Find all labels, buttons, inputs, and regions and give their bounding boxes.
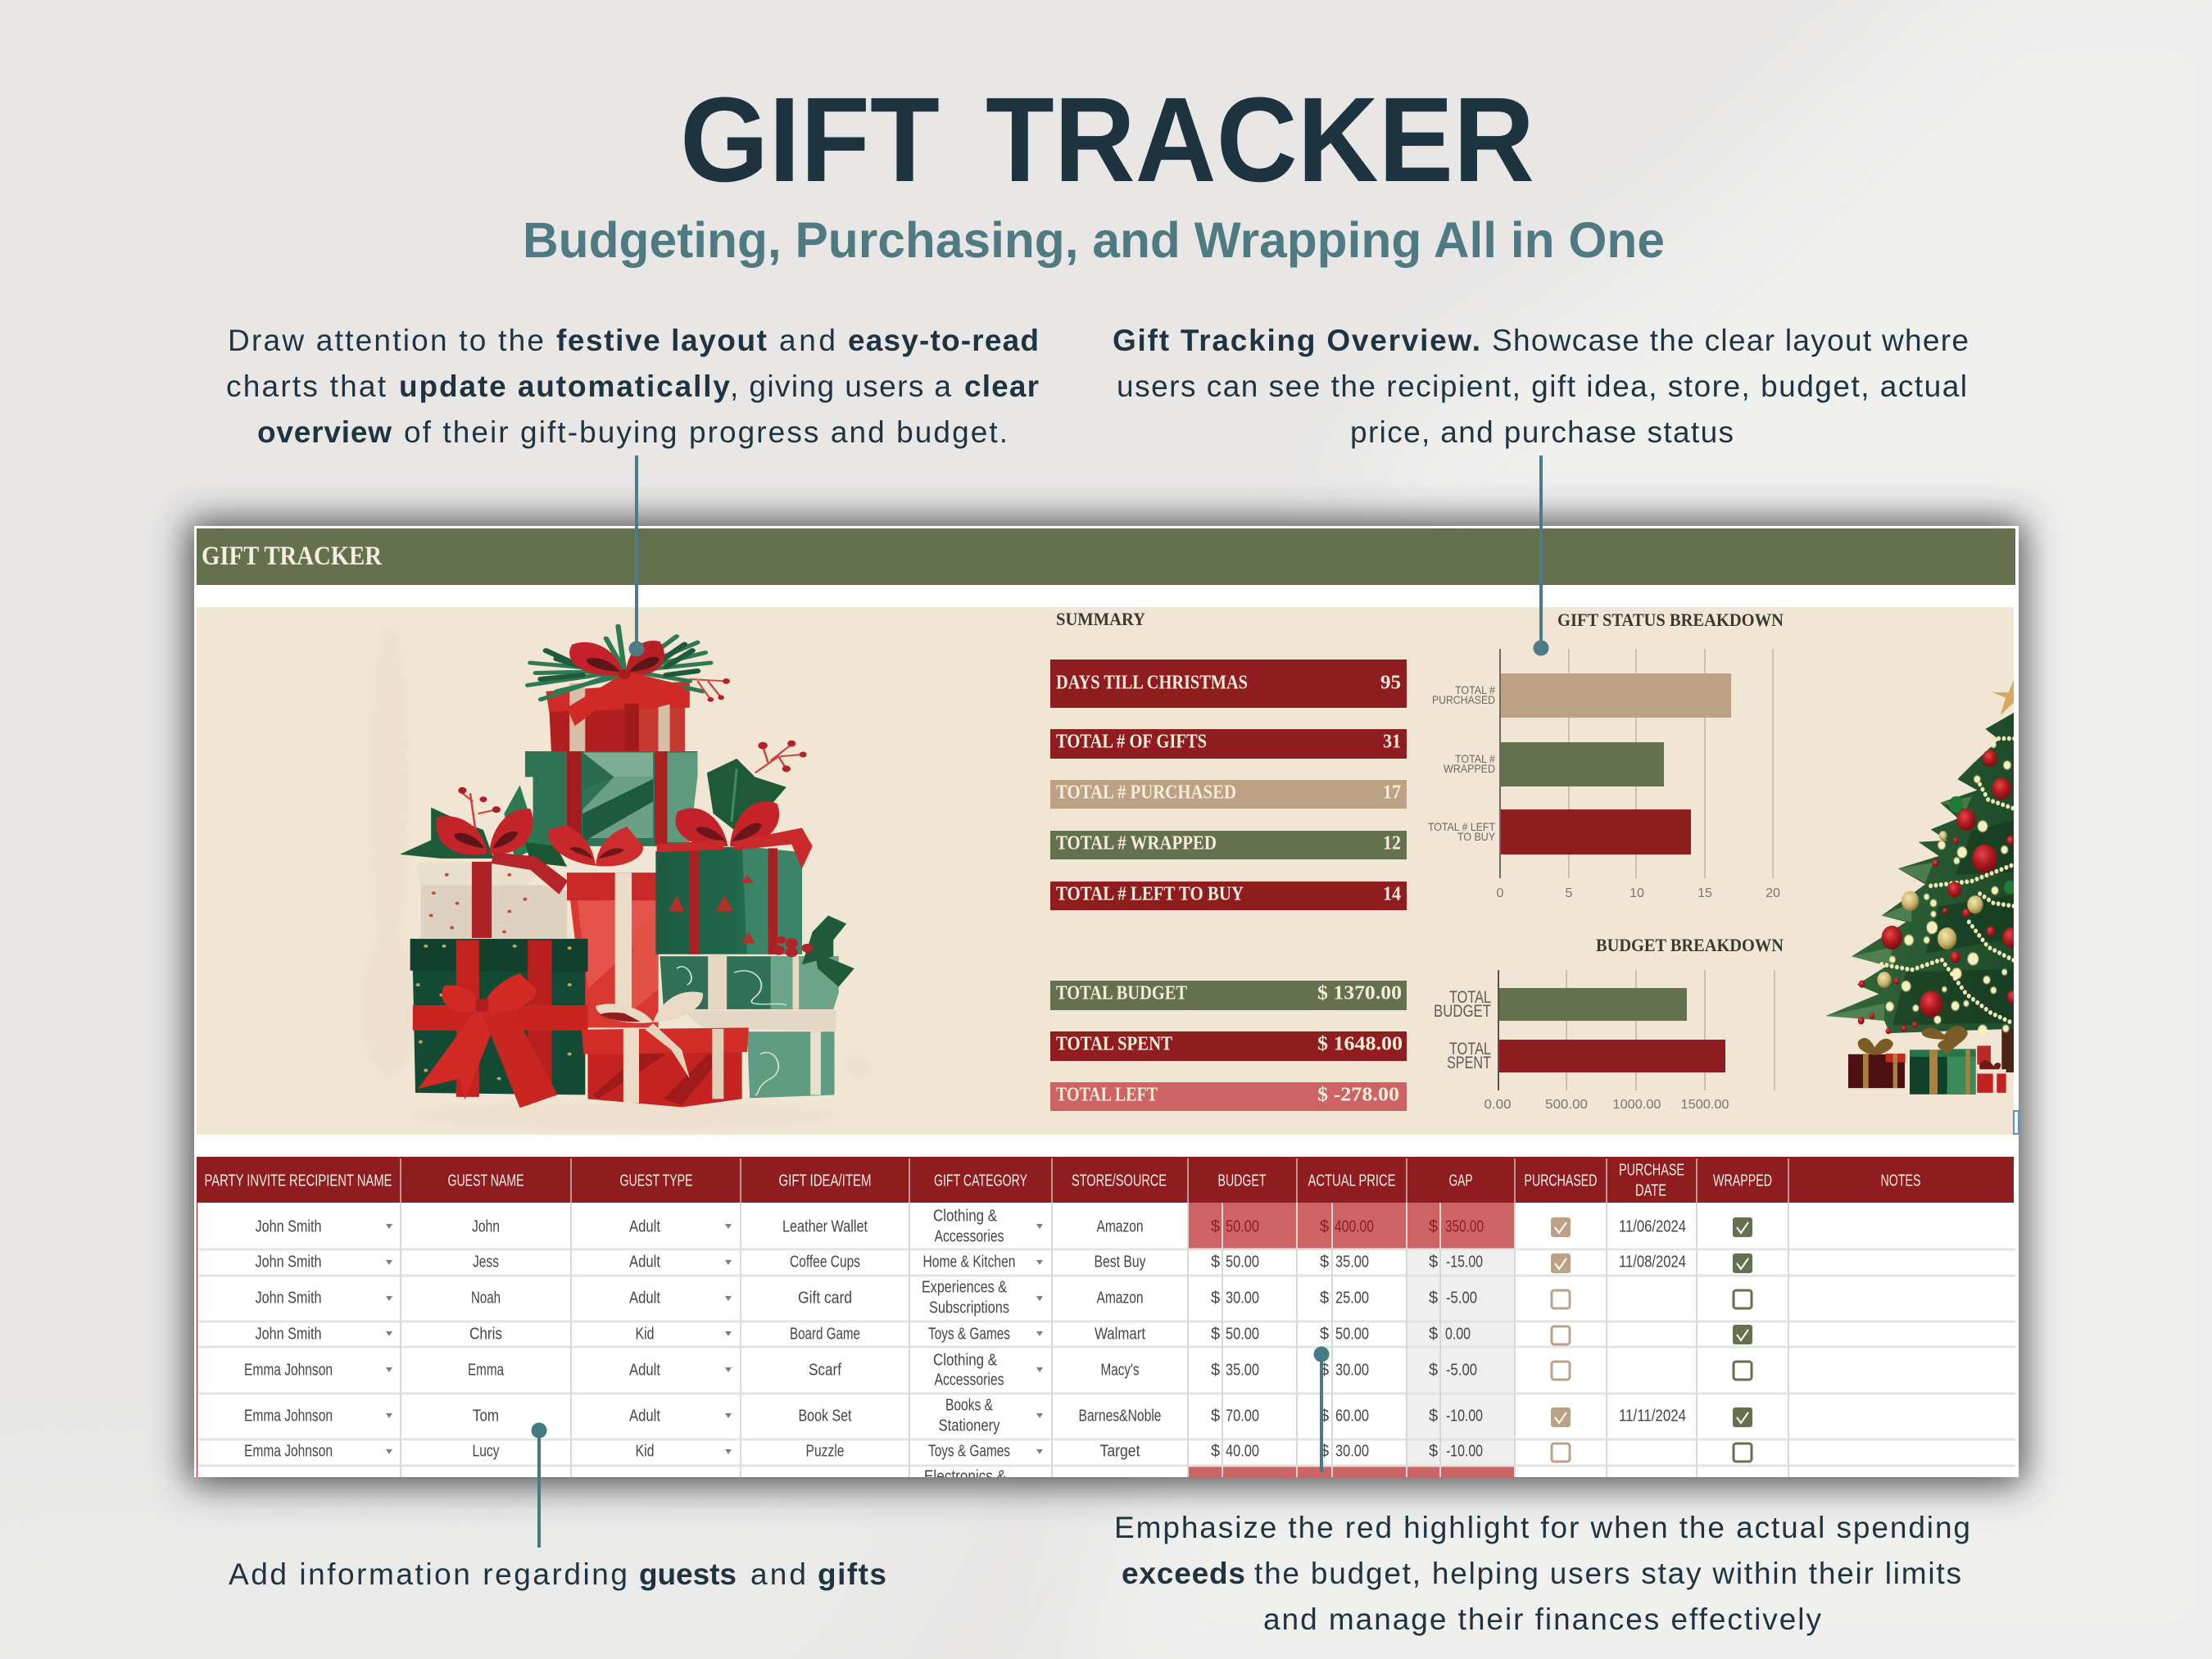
table header row: PARTY INVITE RECIPIENT NAME <box>205 1172 392 1190</box>
summary stat: left to buy <box>1050 882 1407 910</box>
callout text: red highlight: and manage their finances effectively <box>1263 1602 1822 1636</box>
gift categories: Experiences & <box>922 1278 1008 1296</box>
table header row: WRAPPED <box>1713 1172 1772 1190</box>
budget column: $ <box>1211 1407 1220 1426</box>
budget column: 70.00 <box>1226 1407 1259 1426</box>
bottom red box <box>582 992 749 1107</box>
panel shadow <box>188 521 2024 1484</box>
bar: wrapped <box>1500 742 1664 786</box>
chart: gift status breakdown: TOTAL # <box>1455 683 1495 696</box>
callout text: festive layout: of their gift-buying progress and budget. <box>404 415 1008 449</box>
recipient names: John Smith <box>256 1326 321 1344</box>
callout text: red highlight: the budget, helping users stay within their limits <box>1254 1557 1961 1590</box>
guest types: Adult <box>629 1217 660 1235</box>
guest types: Adult <box>629 1362 660 1380</box>
header band: GIFT TRACKER <box>202 542 383 571</box>
summary stat: total spent: $ 1648.00 <box>1317 1034 1403 1055</box>
callout text: guests and gifts: guests <box>639 1557 737 1591</box>
actual price column: 25.00 <box>1335 1290 1369 1308</box>
chart: gift status breakdown: 20 <box>1766 886 1780 900</box>
guest names: Noah <box>471 1290 501 1308</box>
chart: budget breakdown: 500.00 <box>1545 1098 1588 1112</box>
gift categories: Books & <box>945 1396 994 1414</box>
right bow and holly <box>657 741 813 868</box>
callout text: guests and gifts: Add information regarding <box>229 1557 628 1591</box>
title: GIFT <box>680 73 940 207</box>
chart: gift status breakdown: 10 <box>1630 886 1644 900</box>
stores: Amazon <box>1096 1217 1144 1235</box>
gift categories: Electronics & <box>924 1468 1007 1486</box>
summary stat: days till christmas: DAYS TILL CHRISTMAS <box>1056 672 1248 693</box>
callout text: red highlight <box>1114 1511 1970 1636</box>
chart: gift status breakdown: TO BUY <box>1457 830 1496 843</box>
small centre bow <box>548 825 643 866</box>
cream box <box>416 862 567 938</box>
summary stat: days till christmas <box>1050 660 1407 708</box>
summary stat: wrapped: 12 <box>1383 832 1401 854</box>
gift ideas: Board Game <box>790 1326 860 1344</box>
budget column: $ <box>1211 1442 1220 1460</box>
gap column: $ <box>1429 1217 1438 1235</box>
teal box <box>525 751 697 846</box>
gift categories: Toys & Games <box>928 1326 1010 1344</box>
table header row: ACTUAL PRICE <box>1308 1172 1396 1190</box>
section heading: summary: SUMMARY <box>1056 609 1145 629</box>
budget column: $ <box>1211 1362 1220 1380</box>
bar: total budget <box>1498 988 1687 1021</box>
gap column: -10.00 <box>1446 1442 1483 1460</box>
chart: gift status breakdown: TOTAL # <box>1455 752 1495 765</box>
actual price column: $ <box>1320 1290 1329 1308</box>
guest names: Jess <box>473 1253 499 1271</box>
summary stat: total left <box>1050 1082 1407 1111</box>
summary stat: total left: TOTAL LEFT <box>1056 1085 1158 1106</box>
guest names: Lucy <box>472 1442 500 1460</box>
callout text: festive layout <box>226 324 1039 449</box>
callout text: guests and gifts <box>229 1557 886 1591</box>
gift categories: Home & Kitchen <box>922 1253 1016 1271</box>
guest types: Adult <box>629 1290 660 1308</box>
summary stat: total budget: TOTAL BUDGET <box>1056 983 1187 1004</box>
callout text: festive layout: easy-to-read <box>848 324 1039 357</box>
callout text: gift tracking overview: Gift Tracking Overview. <box>1113 324 1480 357</box>
budget column: 35.00 <box>1226 1362 1259 1380</box>
chart: budget breakdown: TOTAL <box>1449 1040 1491 1058</box>
gift ideas: Leather Wallet <box>782 1217 868 1235</box>
tree star <box>1992 680 2014 715</box>
actual price column: $ <box>1320 1326 1329 1344</box>
gap column: $ <box>1429 1407 1438 1426</box>
bar: left to buy <box>1500 809 1691 854</box>
gift categories: Subscriptions <box>929 1299 1009 1317</box>
recipient names: John Smith <box>256 1290 321 1308</box>
gap column: $ <box>1429 1326 1438 1344</box>
purchase dates: 11/08/2024 <box>1619 1253 1686 1271</box>
bar: total spent <box>1498 1040 1725 1072</box>
budget column: 30.00 <box>1226 1290 1259 1308</box>
beige dashboard area <box>197 607 2014 1135</box>
selection handle <box>2014 1111 2019 1134</box>
actual price column: 30.00 <box>1335 1442 1369 1460</box>
actual price column: 400.00 <box>1335 1217 1374 1235</box>
header band <box>197 528 2015 585</box>
gift ideas: Coffee Cups <box>790 1253 860 1271</box>
connector: guests and gifts to table <box>531 1422 547 1548</box>
recipient names: John Smith <box>256 1217 321 1235</box>
garlands <box>1882 738 2015 1024</box>
summary stat: days till christmas: 95 <box>1380 672 1401 693</box>
gift categories: Toys & Games <box>928 1442 1010 1460</box>
callout text: festive layout: charts that <box>226 369 387 403</box>
illustration: christmas tree <box>1825 679 2021 1095</box>
stores: Amazon <box>1096 1290 1144 1308</box>
right green box <box>655 846 802 954</box>
table grid <box>197 1249 2015 1466</box>
title: TRACKER <box>986 73 1534 207</box>
actual price column: 50.00 <box>1335 1326 1369 1344</box>
chart: budget breakdown <box>1434 935 1784 1112</box>
guest types: Adult <box>629 1407 660 1426</box>
budget column: 50.00 <box>1226 1217 1259 1235</box>
summary stat: wrapped: TOTAL # WRAPPED <box>1056 832 1217 854</box>
gift ideas <box>782 1217 868 1460</box>
title <box>680 73 1534 207</box>
gift categories: Stationery <box>939 1417 999 1435</box>
gift categories: Accessories <box>934 1371 1004 1389</box>
budget column: $ <box>1211 1253 1220 1271</box>
chart: gift status breakdown: 0 <box>1497 886 1504 900</box>
guest names: Chris <box>469 1326 502 1344</box>
actual price column <box>1320 1217 1374 1460</box>
subtitle: Budgeting, Purchasing, and Wrapping All in One <box>523 212 1665 268</box>
actual price column: 60.00 <box>1335 1407 1369 1426</box>
gift ideas: Puzzle <box>806 1442 844 1460</box>
actual price column: $ <box>1320 1217 1329 1235</box>
centre red wrapped box <box>567 873 659 1027</box>
illustration: stack of gifts <box>360 622 873 1130</box>
recipient names: John Smith <box>256 1253 321 1271</box>
guest names <box>468 1217 505 1460</box>
chart: gift status breakdown: PURCHASED <box>1432 693 1495 706</box>
table header row <box>197 1157 2014 1203</box>
budget column: 40.00 <box>1226 1442 1259 1460</box>
table header row: PURCHASED <box>1524 1172 1598 1190</box>
chart: gift status breakdown: TOTAL # LEFT <box>1428 820 1495 833</box>
chart: gift status breakdown: 15 <box>1698 886 1712 900</box>
stores: Barnes&Noble <box>1078 1407 1162 1426</box>
chart: budget breakdown: SPENT <box>1447 1054 1491 1072</box>
tree foliage <box>1825 709 2021 1033</box>
summary stat: total budget: $ 1370.00 <box>1317 983 1402 1004</box>
callout text: guests and gifts: gifts <box>818 1557 886 1591</box>
gap column: $ <box>1429 1442 1438 1460</box>
summary stat: total left: $ -278.00 <box>1317 1085 1399 1106</box>
callout text: gift tracking overview: price, and purchase status <box>1350 415 1734 449</box>
callout text: festive layout: update automatically <box>399 369 730 403</box>
purchased checkboxes <box>1551 1217 1571 1462</box>
dark green box <box>410 939 587 1108</box>
lower right teal box <box>660 916 854 1098</box>
actual price column: $ <box>1320 1253 1329 1271</box>
summary stat: purchased: TOTAL # PURCHASED <box>1056 782 1236 803</box>
guest types: Adult <box>629 1253 660 1271</box>
chart: gift status breakdown: WRAPPED <box>1444 762 1495 775</box>
gap column <box>1429 1217 1484 1460</box>
wrapped checkboxes <box>1733 1217 1752 1462</box>
chart: budget breakdown: 0.00 <box>1484 1098 1512 1112</box>
recipient names <box>244 1217 333 1460</box>
gift ideas: Gift card <box>798 1290 852 1308</box>
callout text: festive layout: and <box>779 324 836 357</box>
gap column: $ <box>1429 1290 1438 1308</box>
gift categories: Clothing & <box>933 1208 998 1226</box>
gap column: -5.00 <box>1446 1290 1477 1308</box>
summary stat: left to buy: TOTAL # LEFT TO BUY <box>1056 883 1244 904</box>
top red box <box>546 681 690 751</box>
purchase dates: 11/11/2024 <box>1619 1407 1686 1426</box>
actual price column: $ <box>1320 1407 1329 1426</box>
callout text: gift tracking overview: users can see the recipient, gift idea, store, budget, actual <box>1117 369 1967 403</box>
table header row: BUDGET <box>1217 1172 1267 1190</box>
actual price column: 30.00 <box>1335 1362 1369 1380</box>
recipient names: Emma Johnson <box>244 1407 333 1426</box>
summary stat: total gifts: TOTAL # OF GIFTS <box>1056 731 1207 752</box>
budget column: $ <box>1211 1326 1220 1344</box>
purchase dates: 11/06/2024 <box>1619 1217 1686 1235</box>
summary stat: total gifts <box>1050 729 1407 759</box>
guest names: John <box>472 1217 500 1235</box>
recipient names: Emma Johnson <box>244 1442 333 1460</box>
table left edge <box>195 1157 197 1477</box>
connector: red highlight to price column <box>1314 1347 1329 1472</box>
gap column: $ <box>1429 1253 1438 1271</box>
gap column: -5.00 <box>1446 1362 1477 1380</box>
budget column <box>1211 1217 1259 1460</box>
chart: budget breakdown: 1500.00 <box>1681 1098 1729 1112</box>
budget highlight cells <box>1188 1203 1515 1477</box>
gap column: -10.00 <box>1446 1407 1483 1426</box>
guest names: Tom <box>473 1407 499 1426</box>
table header row: GUEST TYPE <box>619 1172 693 1190</box>
left bow and holly <box>400 785 568 895</box>
gap column: -15.00 <box>1446 1253 1483 1271</box>
budget column: 50.00 <box>1226 1253 1259 1271</box>
actual price column: $ <box>1320 1362 1329 1380</box>
stores: Best Buy <box>1095 1253 1145 1271</box>
table header row: GIFT IDEA/ITEM <box>778 1172 872 1190</box>
callout text: gift tracking overview <box>1113 324 1969 449</box>
guest types <box>629 1217 660 1460</box>
gift categories <box>922 1208 1016 1486</box>
callout text: festive layout: Draw attention to the <box>228 324 544 357</box>
gap column: 0.00 <box>1445 1326 1471 1344</box>
summary stat: total spent: TOTAL SPENT <box>1056 1034 1172 1055</box>
guest types: Kid <box>636 1326 654 1344</box>
budget column: $ <box>1211 1217 1220 1235</box>
ornaments <box>1858 750 2020 1034</box>
connector: gift tracking overview to chart <box>1534 456 1548 655</box>
summary stat: left to buy: 14 <box>1383 883 1401 904</box>
actual price column: 35.00 <box>1335 1253 1369 1271</box>
chart: budget breakdown: TOTAL <box>1449 988 1491 1007</box>
purchase dates <box>1619 1217 1686 1426</box>
callout text: festive layout: , giving users a <box>730 369 951 403</box>
chart: gift status breakdown <box>1428 610 1784 900</box>
lights <box>1886 741 2011 1036</box>
chart: budget breakdown: 1000.00 <box>1612 1098 1661 1112</box>
recipient names: Emma Johnson <box>244 1362 333 1380</box>
chart: budget breakdown: BUDGET BREAKDOWN <box>1596 935 1784 955</box>
top bow and pine <box>528 626 730 726</box>
guest types: Kid <box>636 1442 654 1460</box>
gift ideas: Book Set <box>798 1407 852 1426</box>
callout text: red highlight: Emphasize the red highlight for when the actual spending <box>1114 1511 1970 1544</box>
table header row: GIFT CATEGORY <box>934 1172 1027 1190</box>
summary stat: total gifts: 31 <box>1383 731 1401 752</box>
callout text: red highlight: exceeds <box>1122 1557 1245 1590</box>
chart: gift status breakdown: GIFT STATUS BREAKDOWN <box>1557 610 1784 630</box>
gift categories: Clothing & <box>933 1352 998 1370</box>
table header row: STORE/SOURCE <box>1072 1172 1167 1190</box>
guest names: Emma <box>468 1362 505 1380</box>
summary stat: purchased: 17 <box>1383 782 1401 803</box>
chart: budget breakdown: BUDGET <box>1434 1002 1491 1021</box>
table header row: NOTES <box>1881 1172 1920 1190</box>
stores: Target <box>1099 1442 1140 1460</box>
callout text: guests and gifts: and <box>750 1557 806 1591</box>
summary stat: total spent <box>1050 1031 1407 1061</box>
summary stat: total budget <box>1050 981 1407 1010</box>
table header row: GUEST NAME <box>447 1172 524 1190</box>
gap column: 350.00 <box>1445 1217 1484 1235</box>
table header row: DATE <box>1635 1181 1666 1199</box>
callout text: gift tracking overview: Showcase the clear layout where <box>1492 324 1969 357</box>
table header row: PURCHASE <box>1619 1162 1684 1180</box>
gift categories: Accessories <box>934 1227 1004 1245</box>
bar: purchased <box>1500 673 1731 718</box>
callout text: festive layout: festive layout <box>556 324 767 357</box>
panel: spreadsheet screenshot <box>194 526 2021 1486</box>
summary stat: wrapped <box>1050 831 1407 859</box>
callout text: festive layout: overview <box>257 415 392 449</box>
callout text: festive layout: clear <box>964 369 1039 403</box>
budget column: $ <box>1211 1290 1220 1308</box>
gap column: $ <box>1429 1362 1438 1380</box>
connector: festive layout to gifts <box>629 456 644 657</box>
table header row: GAP <box>1448 1172 1473 1190</box>
chart: gift status breakdown: 5 <box>1566 886 1573 900</box>
gift ideas: Scarf <box>809 1362 841 1380</box>
actual price column: $ <box>1320 1442 1329 1460</box>
trunk <box>2001 1029 2014 1072</box>
table: gift list <box>195 1157 2015 1486</box>
tree gifts <box>1848 1026 2006 1095</box>
stores <box>1078 1217 1162 1460</box>
budget column: 50.00 <box>1226 1326 1259 1344</box>
summary stat: purchased <box>1050 780 1407 809</box>
dropdown arrows <box>386 1224 1043 1454</box>
stores: Walmart <box>1095 1326 1145 1344</box>
stores: Macy's <box>1101 1362 1139 1380</box>
